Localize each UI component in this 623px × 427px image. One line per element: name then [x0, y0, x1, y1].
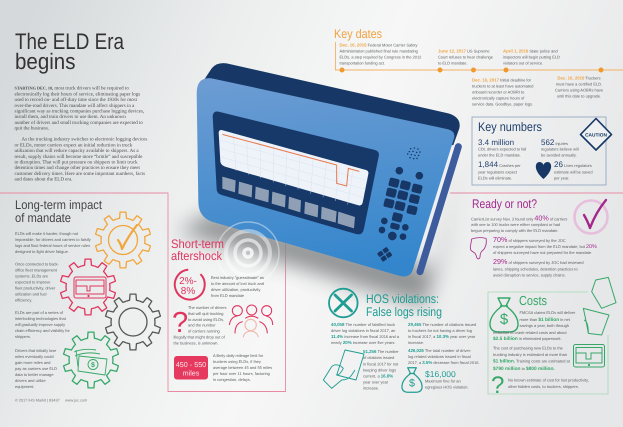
- icon: green money bag: $: [500, 311, 509, 328]
- stat: 26: 26 Lives regulators: [554, 160, 592, 169]
- panel: key dates: [334, 27, 623, 106]
- text block: long-term: miles eventually could: [15, 354, 54, 359]
- intro text: result, supply chains will become more “brittle” and susceptible: [14, 154, 143, 160]
- date: June 12 2017: June 12, 2017 US Supreme: [438, 48, 490, 54]
- text: unknown drivers: to avoid using ELDs,: [188, 317, 224, 322]
- heading: short-term aftershock: [171, 237, 224, 263]
- text: unknown drivers: of carriers running: [188, 328, 220, 334]
- panel: long-term impact: [15, 198, 162, 402]
- callout: 450-550 miles: 450 - 550: [176, 360, 206, 369]
- heading: short-term aftershock: Short-term: [171, 237, 224, 251]
- heading: HOS violations: HOS violations:: [366, 292, 439, 306]
- text block: long-term: expected to improve: [15, 280, 51, 284]
- text: unknown drivers: that will quit trucking: [188, 311, 223, 316]
- date: June 12 2017: to ELD mandate.: [438, 60, 468, 66]
- screen: [219, 130, 368, 205]
- text: 29%: avoid disruption to service, supply chains.: [493, 272, 566, 278]
- date: Dec 18 2017: truckers to at least have automated: [472, 84, 534, 88]
- text: 16,000 fine: [425, 369, 469, 390]
- heading: key dates: Key dates: [334, 27, 382, 41]
- intro text: customer delivery times. Here are some important numbers, facts: [14, 171, 145, 177]
- text: mileage limit: average between 45 and 55 miles: [213, 365, 272, 370]
- text: no estimate: No known estimate of cost for lost productivity,: [508, 378, 589, 382]
- icon: hand holding paper: [323, 350, 364, 388]
- text: guesstimate: driver utilization, productivity: [211, 287, 260, 292]
- text block: long-term: ELDs will make it harder, though not: [15, 231, 79, 236]
- text: 29,465: to truckers for not having a driver log: [408, 328, 472, 333]
- speaker: [407, 147, 421, 159]
- date: Dec 18 2017: onboard recorder or AOBRI to: [472, 90, 525, 94]
- text: no estimate: [508, 378, 589, 389]
- intro text: and dates about the ELD era.: [14, 176, 73, 182]
- stat ring: 2%-8%: [171, 267, 208, 304]
- text: 40,058: [331, 322, 400, 345]
- stat ring: 2%-8%: 8%: [181, 286, 195, 297]
- text: mileage limit: truckers using ELDs, if they: [213, 359, 261, 364]
- icon: green gear with cash: $: [91, 361, 95, 369]
- stat: 3.4 million: CDL drivers expected to fall: [478, 146, 526, 152]
- stat: 1,844: 1,844 Crashes per: [478, 160, 521, 169]
- intro text: or ELDs, motor carriers expect an initial reduction in truck: [14, 142, 133, 148]
- stylus: [420, 147, 458, 272]
- intro text: utilization that will reduce capacity available to shippers. As a: [14, 148, 139, 154]
- icon: green question mark: ?: [491, 372, 504, 399]
- text: savings: savings a year, both through: [520, 323, 569, 328]
- text block: long-term: impossible, for drivers and carriers to falsify: [15, 237, 91, 242]
- text: 70%: expect a negative impact from the ELD mandate, but 20%: [493, 244, 597, 250]
- text block: long-term: ELDs are part of a series of: [15, 310, 64, 315]
- text: unknown drivers: [174, 305, 227, 346]
- text: 51,256: keeping driver logs: [363, 368, 396, 372]
- heading: long-term impact: Long-term impact: [15, 198, 102, 212]
- heading: ready or not: Ready or not?: [472, 197, 537, 211]
- text block: long-term: interlocking technologies that: [15, 316, 67, 321]
- text: 70%: 70% of shippers surveyed by the JOC: [493, 235, 566, 244]
- date: April 1 2018: violators out of service.: [503, 60, 543, 66]
- text block: long-term: fleet productivity, driver: [15, 286, 56, 290]
- panel: costs: [488, 277, 616, 399]
- title: [15, 29, 124, 74]
- text: 426,026: [408, 348, 480, 365]
- intro text: used to record on- and off-duty time since the 1930s for most: [14, 97, 138, 103]
- icon: orange gear with check: [94, 212, 152, 268]
- text: 426,026: 2017, a 3.5% decrease from fiscal 2016.: [408, 360, 480, 365]
- icon: teal money bag: [402, 368, 422, 392]
- text: savings: more than $1 billion in net: [520, 317, 571, 323]
- stat ring: 2%-8%: 2%-: [179, 276, 197, 287]
- text block: long-term: chain efficiency and visibility for: [15, 328, 71, 333]
- text block: long-term: drivers and utilize: [15, 378, 46, 383]
- text: guesstimate: Best industry “guesstimate” as: [211, 275, 264, 280]
- text: guesstimate: to the amount of lost truck and: [211, 281, 264, 286]
- intro text: electronically log their hours of service, eliminating paper logs: [14, 92, 140, 98]
- intro text: significant way as trucking companies purchase logging devices,: [14, 108, 144, 114]
- icon: red gear with monitor: [59, 259, 117, 315]
- stat: 562: regulators believe will: [541, 146, 579, 152]
- icon: caution sign: CAUTION: [585, 132, 607, 138]
- panel: ready or not: [470, 197, 608, 278]
- date: Dec 16 2015: Dec. 16, 2015 Federal Motor Carrier Safety: [340, 42, 418, 48]
- icon: grey gear: [104, 294, 162, 350]
- text: 70%: of shippers surveyed have not prepared for the mandate.: [493, 250, 592, 255]
- device back: [197, 63, 460, 163]
- text block: long-term: logs and flout federal hours of service rules: [15, 243, 90, 248]
- text: mileage limit: in congestion, delays.: [213, 377, 251, 382]
- stat: 3.4 million: 3.4 million: [478, 138, 514, 147]
- text block: long-term: utilization and fuel: [15, 292, 47, 296]
- text: purchase cost: $790 million to $800 million.: [493, 366, 555, 372]
- intro text: over-the-road drivers. This mandate will affect shippers in a: [14, 103, 135, 109]
- text block: long-term: systems, ELDs are: [15, 274, 49, 278]
- text block: long-term: efficiency.: [15, 298, 32, 302]
- text: 51,256: in fiscal 2017 for not: [363, 362, 399, 366]
- text: carrier survey: begun preparing to comply with the ELD mandate.: [471, 228, 559, 233]
- footer: © 2017 IHS Markit | 83437: [15, 398, 60, 402]
- text: 16,000 fine: $16,000: [425, 369, 456, 379]
- stat: 3.4 million: [478, 138, 526, 158]
- date: Dec 18 2017: [472, 78, 534, 106]
- panel: key numbers: [472, 117, 612, 185]
- icon: purple check: [574, 200, 608, 234]
- heading: HOS violations: [366, 292, 442, 319]
- text: 51,256: increase.: [363, 386, 379, 390]
- intro text: [14, 86, 147, 182]
- date: Dec 16 2015: Administration published final rule mandating: [340, 48, 418, 54]
- text: 51,256: [363, 349, 399, 390]
- device shadow: [178, 150, 466, 306]
- intro text: STARTING DEC. 18, most truck drivers will be required to: [14, 86, 129, 92]
- screen grid and trace: [219, 134, 367, 205]
- text: purchase cost: The cost of purchasing new ELDs to the: [493, 346, 564, 350]
- intro text: number of drivers and small trucking companies are expected to: [14, 120, 143, 126]
- heading: short-term aftershock: aftershock: [171, 249, 223, 263]
- date: Dec 16 2019: Carriers using AOBRs have: [555, 88, 604, 92]
- text: 29,465: in fiscal 2017, a 10.3% year over year: [408, 334, 476, 339]
- screen bezel: [213, 112, 379, 234]
- text block: long-term: equipment.: [15, 384, 34, 389]
- date: Dec 16 2015: transportation funding act.: [340, 60, 385, 66]
- text: 16,000 fine: egregious HOS violation.: [425, 384, 469, 390]
- text: 426,026: 426,026 The total number of driver-: [408, 348, 472, 353]
- text: guesstimate: [211, 275, 264, 298]
- text: 29,465: increase.: [408, 340, 424, 345]
- icon: question mark: ?: [172, 307, 188, 339]
- title: The ELD Era: [15, 29, 124, 54]
- text: 29,465: [408, 322, 476, 345]
- intro text: As the trucking industry switches to electronic logging devices: [22, 136, 147, 142]
- function buttons: [222, 177, 355, 228]
- text: carrier survey: [471, 214, 567, 233]
- icon: sticky notes: [583, 277, 616, 335]
- date: Dec 16 2019: [555, 76, 604, 98]
- heading: long-term impact: of mandate: [15, 211, 71, 225]
- callout: 450-550 miles: miles: [183, 368, 200, 378]
- text: no estimate: other hidden costs, to truckers, shippers.: [508, 384, 579, 389]
- text: 29%: 29% of shippers surveyed by JOC had reviewed: [493, 257, 584, 266]
- date: April 1 2018: April 1, 2018 State police and: [503, 48, 558, 54]
- text: purchase cost: [493, 346, 571, 372]
- stat: 26: [554, 160, 593, 180]
- intro text: quit the business.: [14, 126, 49, 132]
- text: mileage limit: per hour over 11 hours, factoring: [213, 371, 270, 376]
- text block: long-term: pay as carriers use ELD: [15, 366, 57, 371]
- date: Dec 18 2017: electronically capture hours of: [472, 96, 525, 100]
- text: mileage limit: A likely daily mileage limit for: [213, 353, 264, 358]
- date: June 12 2017: [438, 48, 494, 66]
- date: June 12 2017: Court refuses to hear challenge: [438, 54, 494, 60]
- text: carrier survey: CarrierList survey Nov. 3 found only 40% of carriers: [471, 214, 567, 222]
- icon: X in circle: [329, 289, 358, 317]
- icon: green monitor: [574, 344, 604, 367]
- stat: 562: [541, 138, 579, 158]
- icon: teal money bag: $: [409, 377, 415, 389]
- text: 51,256: current, a 16.8%: [363, 374, 393, 378]
- stat: 26: estimate will be saved: [554, 170, 593, 174]
- stat: 26: per year.: [554, 176, 569, 180]
- text: 51,256: of citations issued: [363, 355, 394, 360]
- text: 40,058: driver log violations in fiscal 2017, an: [331, 328, 395, 333]
- text: unknown drivers: illegally that might drop out of: [174, 334, 226, 340]
- text: 51,256: year over year: [363, 380, 389, 384]
- panel: long-term impact: www.joc.com: [65, 398, 87, 402]
- text block: long-term: [15, 231, 91, 389]
- date: Dec 18 2017: Dec. 18, 2017 Initial deadline for: [472, 78, 532, 82]
- intro text: to disruption. That will put pressure on shippers to limit truck: [14, 160, 138, 166]
- text: purchase cost: $1 billion. Training costs are estimated at: [493, 358, 571, 364]
- heading: key numbers: Key numbers: [478, 120, 542, 134]
- icon: thumbs down: [470, 238, 486, 259]
- text: guesstimate: from ELD mandate: [211, 293, 245, 298]
- title: begins: [15, 49, 76, 74]
- date: Dec 16 2015: [340, 42, 421, 66]
- callout: 450-550 miles: [174, 356, 208, 380]
- text: unknown drivers: The number of drivers: [188, 305, 227, 310]
- text: savings: FMCSA claims ELDs will deliver: [520, 310, 576, 315]
- stat: 562: 562 injuries: [541, 138, 568, 147]
- stat: 1,844: [478, 160, 521, 180]
- text: unknown drivers: the business, is unknown.: [174, 340, 219, 346]
- text: carrier survey: with one to 100 trucks were either compliant or had: [471, 222, 560, 227]
- text block: long-term: data to better manage: [15, 372, 54, 377]
- text: 29%: [493, 257, 584, 278]
- icon: people group: [229, 305, 273, 337]
- stat: 3.4 million: under the ELD mandate.: [478, 152, 521, 158]
- text block: long-term: shippers.: [15, 334, 31, 339]
- icon: signal rings: [217, 222, 279, 284]
- text: savings: reduction of crash-related costs and about: [493, 330, 567, 335]
- date: April 1 2018: inspectors will begin putting ELD: [503, 54, 560, 60]
- text block: long-term: Once connected to back-: [15, 262, 59, 266]
- heading: long-term impact: [15, 198, 102, 225]
- text: 29,465: 29,465 The number of citations issued: [408, 322, 476, 327]
- text: 51,256: 51,256 The number: [363, 349, 399, 354]
- text block: long-term: designed to fight driver fatigue.: [15, 249, 69, 254]
- text: 70%: [493, 235, 597, 255]
- date: Dec 16 2019: until this date to upgrade.: [557, 94, 601, 98]
- text: 29%: lanes, shipping schedules, detention practices to: [493, 266, 579, 272]
- date: Dec 16 2019: Dec. 16, 2019 Truckers: [557, 76, 601, 80]
- text: 40,058: nearly 20% increase over five years.: [331, 340, 395, 345]
- date: Dec 16 2015: ELDs, a step required by Congress in the 2012: [340, 54, 421, 60]
- text: 40,058: 40,058 The number of falsified truck: [331, 322, 395, 327]
- icon: green gear with cash: [62, 332, 120, 388]
- intro text: install them, and train drivers to use them. An unknown: [14, 114, 126, 120]
- heading: costs: Costs: [519, 293, 547, 308]
- text: savings: $2.5 billion in eliminated paperwork.: [493, 336, 562, 342]
- illustration: ELD device: [197, 63, 460, 276]
- text block: long-term: will gradually improve supply: [15, 322, 65, 327]
- date: Dec 16 2019: must have a certified ELD.: [556, 82, 602, 86]
- keypad: [377, 167, 423, 262]
- stat: 1,844: year regulators expect: [478, 170, 518, 174]
- date: Dec 18 2017: service data. Goodbye, paper logs.: [472, 102, 533, 106]
- date: April 1 2018: [503, 48, 560, 66]
- stat: 562: be avoided annually.: [541, 152, 577, 158]
- text: purchase cost: trucking industry is estimated at more than: [493, 352, 567, 357]
- text: mileage limit: [213, 353, 272, 382]
- icon: heart: [536, 162, 551, 179]
- panel: short-term aftershock: [171, 237, 273, 382]
- text: 16,000 fine: Maximum fine for an: [425, 378, 461, 384]
- text: 426,026: log related violations issued in fiscal: [408, 354, 471, 359]
- text block: long-term: office fleet management: [15, 268, 58, 272]
- panel: HOS violations: [323, 289, 480, 392]
- timeline: [336, 42, 623, 72]
- text: savings: [493, 310, 576, 342]
- intro text: detention times and change other practices to ensure they meet: [14, 165, 140, 171]
- text: 40,058: 11.4% increase from fiscal 2016 and a: [331, 334, 400, 339]
- text block: long-term: gain more miles and: [15, 360, 50, 365]
- device face: [197, 78, 454, 276]
- text: unknown drivers: and the number: [188, 322, 216, 328]
- heading: HOS violations: False logs rising: [366, 305, 442, 319]
- text block: long-term: Drivers that initially lose: [15, 348, 57, 353]
- stat: 1,844: ELDs will eliminate.: [478, 176, 512, 180]
